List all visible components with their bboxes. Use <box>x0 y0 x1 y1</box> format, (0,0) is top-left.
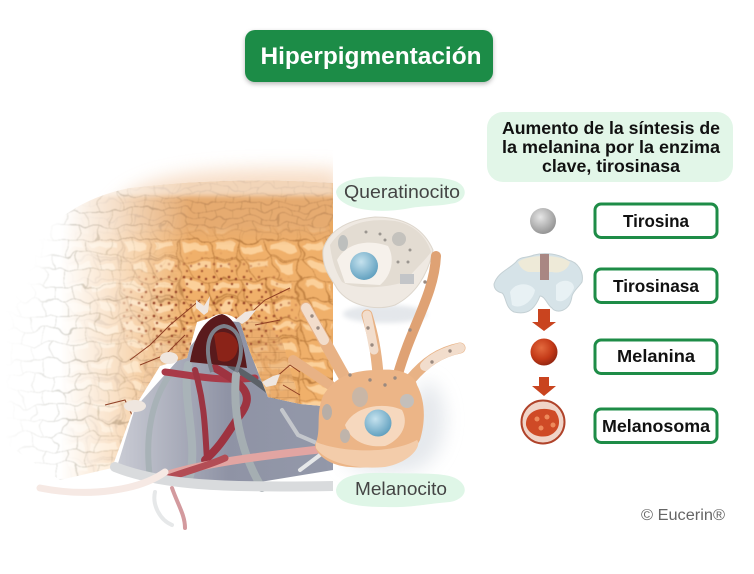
callout: tyrosinase synthesis <box>487 112 733 182</box>
dermal papilla with capillary loop <box>190 314 247 372</box>
melanocyte bodies in skin <box>124 296 280 412</box>
skin cells: orange pigmented zone <box>66 180 333 478</box>
label box: Tirosina <box>595 204 717 238</box>
title <box>245 30 493 82</box>
icon: tyrosinase enzyme with arrow <box>494 254 582 331</box>
keratinocyte cell <box>323 217 433 323</box>
melanin granules <box>104 252 304 415</box>
callout: tyrosinase synthesis: Aumento de la síntesis de <box>502 118 720 138</box>
label: Queratinocito: Queratinocito <box>344 181 460 202</box>
label box: Tirosina: Tirosina <box>623 211 689 231</box>
arrow: melanin to melanosome <box>532 377 556 396</box>
pale lower vessels fading out <box>40 455 333 528</box>
illustration: skin cross-section with blood vessels <box>20 160 333 530</box>
copyright text: © Eucerin® <box>641 507 726 524</box>
icon: tyrosine sphere <box>530 208 556 234</box>
callout: tyrosinase synthesis: clave, tirosinasa <box>542 156 680 176</box>
label: Melanocito <box>336 473 465 507</box>
skin cells: white outlined zone <box>20 180 328 480</box>
dermis grey background <box>116 320 333 482</box>
glow above skin surface <box>118 160 333 190</box>
label: Melanocito: Melanocito <box>355 478 447 499</box>
label box: Melanosoma: Melanosoma <box>602 416 710 436</box>
callout: tyrosinase synthesis: la melanina por la enzima <box>502 137 720 157</box>
blood vessels <box>148 365 333 488</box>
label: Queratinocito <box>336 177 465 211</box>
label box: Melanosoma <box>595 409 717 442</box>
white fade at upper left <box>22 209 76 288</box>
label box: Melanina <box>595 340 717 374</box>
label box: Tirosinasa <box>595 269 717 302</box>
icon: melanin sphere <box>530 338 558 366</box>
icon: melanosome <box>522 400 564 444</box>
label box: Melanina: Melanina <box>617 346 695 366</box>
title: Hiperpigmentación <box>260 43 482 70</box>
melanocyte cell with dendrites <box>293 256 460 473</box>
label box: Tirosinasa: Tirosinasa <box>613 276 699 296</box>
